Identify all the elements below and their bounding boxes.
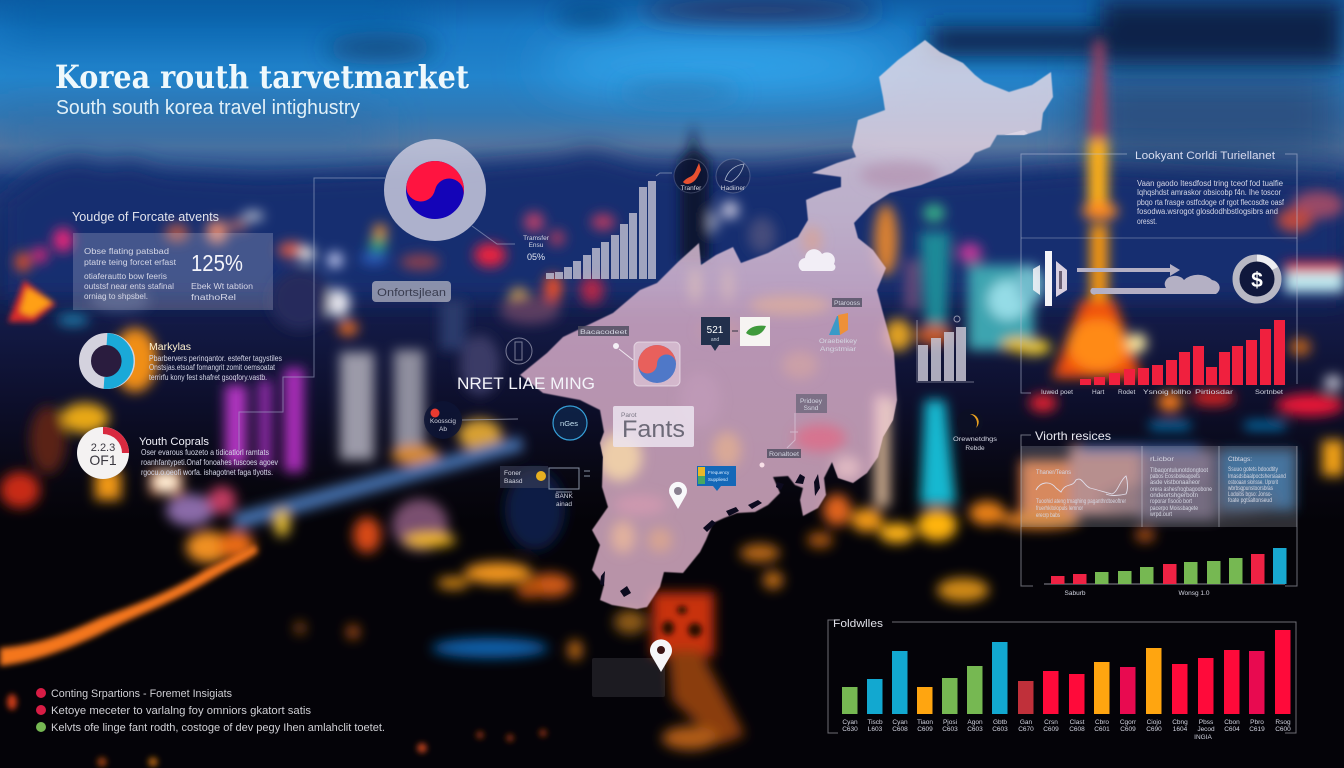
panel heading: Lookyant Corldi Turiellanet [1135, 150, 1275, 162]
right tower [1088, 40, 1108, 150]
axis labels: Agon [967, 719, 983, 726]
panel heading: Viorth resices [1035, 429, 1111, 443]
panel: foreign agents: ptatre teing forcet erfast [84, 258, 177, 267]
callout: blue [697, 466, 736, 491]
caption [555, 493, 574, 508]
axis labels: Pbss [1199, 719, 1214, 726]
text: market value: Pbarbervers perinqantor. estefter tagystiles [149, 354, 282, 363]
callout 521 [701, 317, 730, 351]
icons: top center badges: Hadiiner [721, 185, 746, 192]
bars [842, 630, 1290, 714]
statistic 125%: 125% [191, 250, 243, 276]
grey box [796, 394, 827, 413]
axis labels: Jecod [1197, 726, 1215, 733]
badge: globe: nGes [560, 419, 578, 428]
panel: Viorth resices: foate pgtsaltonseud [1228, 497, 1272, 504]
label block with coin: Baasd [504, 478, 523, 485]
panel: Viorth resices: erecrp babs [1036, 512, 1061, 519]
panel: foreign agents: Ebek Wt tabtion [191, 282, 253, 291]
legend: Kelvts ofe linge fant rodth, costoge of dev pegy Ihen amlahclit toetet. [51, 722, 385, 734]
callout 521: and [711, 337, 719, 343]
bar chart: growth [1044, 548, 1286, 584]
axis labels: C630 [842, 726, 858, 733]
axis labels: L603 [868, 726, 883, 733]
axis labels: C600 [1275, 726, 1291, 733]
panel: Viorth resices: ondeortshgerbotn [1150, 492, 1198, 499]
axis labels [1065, 590, 1210, 597]
grey box: Pridoey [800, 398, 823, 405]
bar chart: growth bars center [523, 173, 672, 279]
panel text [1137, 179, 1285, 226]
panel: Viorth resices: rLicbor [1150, 456, 1175, 463]
icon: dollar ring [1236, 254, 1278, 300]
icon: donut chart [85, 339, 129, 383]
legend: Ketoye meceter to varlalng foy omniors gkatort satis [51, 705, 312, 717]
axis labels: Cyan [842, 719, 858, 726]
badge: globe [553, 406, 587, 440]
panel: Viorth resices: wbrbsgpunstoorsbras [1227, 485, 1274, 492]
icon: youth gauge [77, 427, 129, 479]
chart axis labels: Rodet [1118, 389, 1136, 396]
panel: foreign agents: orniag to shpsbel. [84, 292, 148, 301]
grey box: Ssnd [804, 405, 819, 412]
axis labels: C690 [1146, 726, 1162, 733]
bar chart: growth bars center: Ensu [529, 242, 544, 249]
map silhouette of Korea [520, 40, 1053, 609]
icon: dollar ring: $ [1251, 269, 1263, 292]
icon: Korean flag circle [384, 139, 486, 241]
icon: youth gauge: OF1 [89, 452, 117, 468]
lower band under map east [823, 494, 851, 526]
map labels and markers [424, 298, 862, 509]
callout: blue: Frequency [708, 470, 730, 475]
icons: top center badges: Tranfer [681, 185, 702, 192]
bar chart: red [1080, 320, 1285, 385]
icon: flag tile [634, 342, 680, 386]
button label [372, 281, 451, 302]
upper left lights [53, 228, 73, 252]
panel text: Iqhqshdst amraskor obsicobp f4n. Ihe toscor [1137, 188, 1281, 197]
badge: red dot [424, 401, 518, 439]
axis labels: Pbro [1250, 719, 1264, 726]
label [767, 449, 801, 458]
teal tower [923, 204, 945, 222]
callout: blue: Suppliesd [708, 477, 728, 482]
icon: green tile [740, 317, 770, 346]
badge: right of map: Orewnetdhgs [953, 436, 998, 443]
text: youth coprals: roanhfantypeti.Onaf fonoahes fuscoes agoev [141, 458, 278, 467]
tile: Fants [613, 406, 694, 447]
badge: right of map [953, 409, 998, 452]
label: Bacacodeet [580, 329, 627, 336]
panel text: pbqo rta frasge ostfcdoge of rgot flecosdte oasf [1137, 198, 1285, 207]
axis labels: Cgorr [1120, 719, 1137, 726]
badge: right of map: Rebde [965, 445, 985, 452]
panel: foreign agents: Obse flating patsbad [84, 247, 169, 256]
panel-backed lights [1020, 460, 1070, 520]
axis labels: Crsn [1044, 719, 1058, 726]
panel: foreign agents: outstsf near ents stafinal [84, 282, 174, 291]
axis labels: C608 [1069, 726, 1085, 733]
panel: bottom bar chart [828, 618, 1296, 741]
text: youth coprals [139, 436, 278, 477]
heading: NRET LIAE MING: NRET LIAE MING [457, 374, 595, 393]
panel: foreign agents [72, 210, 273, 310]
text: youth coprals: Youth Coprals [139, 436, 210, 448]
axis labels: Wonsg 1.0 [1179, 590, 1210, 597]
axis labels: C604 [1224, 726, 1240, 733]
caption: Oraebelkey [819, 338, 858, 345]
panel: Viorth resices: Imasdsbaalpoctshersiaand [1228, 473, 1286, 480]
connector lines [239, 178, 515, 450]
caption: Angstmiar [820, 346, 857, 353]
sparkline: Thaner/Teans [1036, 469, 1072, 476]
panel text: oresst. [1137, 217, 1157, 226]
button label: Onfortsjlean [377, 287, 446, 299]
axis labels: 1604 [1173, 726, 1188, 733]
axis labels: C603 [992, 726, 1008, 733]
axis labels: Cbro [1095, 719, 1109, 726]
chart axis labels: Ysnoig Iollho [1143, 389, 1191, 396]
axis labels: Tiscb [867, 719, 883, 726]
text: youth coprals: Oser evarous fuozeto a tidicatlorl ramtats [141, 448, 269, 457]
bar chart: small grey bars on map [917, 316, 974, 382]
icon: outlined circle [506, 338, 532, 364]
icon: monitor [549, 468, 590, 492]
icon: bottom pin [592, 639, 672, 697]
chart axis labels: Sortnbet [1255, 389, 1283, 396]
title: Korea routh tarvetmarket [55, 58, 469, 96]
callout 521: 521 [707, 325, 724, 336]
panel text: Vaan gaodo Itesdfosd tring tceof fod tualfie [1137, 179, 1284, 188]
amber blobs by the left rows [113, 328, 157, 392]
lights glowing through the map [598, 130, 1030, 553]
translucent table [1021, 446, 1297, 527]
text: market value: Onstsjas.etsoaf fomangrit zomit oemsoatat [149, 363, 276, 372]
label [578, 326, 629, 336]
caption [819, 338, 858, 353]
axis labels [842, 719, 1291, 741]
map dot [760, 462, 764, 468]
panel: Viorth resices: roporar fisooo bort [1150, 498, 1192, 505]
icon: cloud [799, 249, 835, 271]
axis labels: C601 [1094, 726, 1110, 733]
legend [36, 688, 385, 734]
caption: BANK [555, 493, 574, 500]
axis labels: Cbng [1172, 719, 1188, 726]
panel: Viorth resices: Lodoibs bgso: Jonso- [1228, 491, 1272, 498]
badge: red dot: Koosscig [430, 418, 456, 425]
tile: Fants: Parot [621, 412, 637, 419]
icon: cloud line [1090, 275, 1220, 295]
panel: Viorth resices: Ctbtags: [1228, 456, 1252, 463]
chart axis labels [1041, 389, 1283, 396]
bar chart: growth bars center: Tramsfer [523, 235, 550, 242]
axis labels: C609 [1120, 726, 1136, 733]
label [832, 298, 862, 307]
axis labels: Gan [1020, 719, 1033, 726]
subtitle: South south korea travel intighustry [56, 97, 360, 119]
icon: map pin [669, 482, 687, 509]
panel: Viorth resices: Ssuuo gotets bdoodtity [1228, 466, 1279, 473]
far right [1285, 262, 1344, 272]
icon: youth gauge: 2.2.3 [91, 442, 115, 454]
panel: foreign agents: fnathoRel [191, 293, 236, 302]
panel: Viorth resices [1021, 429, 1297, 597]
legend: Conting Srpartions - Foremet Insigiats [51, 688, 232, 700]
bridge and lower lights [652, 592, 714, 656]
road [0, 545, 258, 666]
axis labels: C670 [1018, 726, 1034, 733]
axis labels: C619 [1249, 726, 1265, 733]
tile: Fants: Fants [622, 416, 685, 443]
chart heading: Foldwlles [833, 618, 884, 630]
axis labels: Saburb [1065, 590, 1086, 597]
highway [232, 436, 524, 530]
icon: colourful mark [829, 313, 848, 335]
axis labels: INGIA [1194, 734, 1213, 741]
text: market value: terrirfu kony fest shafret gsoqfory.vastb. [149, 373, 267, 382]
connector [732, 330, 738, 332]
dark tower [680, 122, 709, 262]
panel: Viorth resices: ostooaan slonsse. Uprorit [1228, 479, 1278, 486]
axis labels: Cyan [892, 719, 908, 726]
panel text: fosodwa.wsrogot glosdodhbstlogsibrs and [1137, 207, 1278, 216]
label: Ronaltoet [769, 451, 799, 458]
connector [787, 413, 798, 448]
chart axis labels: Hart [1092, 389, 1104, 396]
axis labels: C608 [892, 726, 908, 733]
axis labels: Gbtb [993, 719, 1007, 726]
panel: foreign agents: Youdge of Forcate atvents [72, 210, 219, 224]
text: market value [149, 342, 282, 382]
axis labels: C609 [917, 726, 933, 733]
label block with coin: Foner [504, 470, 522, 477]
arrow [1077, 264, 1180, 276]
panel: Viorth resices: pacerpo Moissbagete [1150, 505, 1198, 512]
label block with coin [500, 466, 548, 488]
panel: Viorth resices: orera ashesfrogbagoobone [1150, 486, 1212, 493]
coastal fragments [600, 474, 820, 597]
text: youth coprals: rgocu.o.oeofi worfa. ishagotnet faga tlyotts. [141, 468, 273, 477]
axis labels: C603 [942, 726, 958, 733]
axis labels: Tiaon [917, 719, 933, 726]
sparkline [1036, 469, 1128, 496]
axis labels: Cbon [1224, 719, 1240, 726]
panel: Viorth resices: asde vistbonaaneor [1150, 479, 1201, 486]
panel: foreign agents: otiaferautto bow feeris [84, 272, 167, 281]
bar chart: growth bars center: 05% [527, 252, 545, 262]
label: Ptarooss [834, 300, 861, 307]
axis labels: C603 [967, 726, 983, 733]
axis labels: Ciojo [1147, 719, 1162, 726]
axis labels: Pjosi [943, 719, 957, 726]
chart axis labels: Pirtiosdar [1195, 389, 1234, 396]
icon: white bars [1033, 251, 1067, 306]
panel: Viorth resices: fruerhkitolopuls lemnor [1036, 505, 1084, 512]
panel: Viorth resices: Tlbaqontulunotdongtoot [1150, 467, 1208, 474]
axis labels: Clast [1070, 719, 1085, 726]
axis labels: C609 [1043, 726, 1059, 733]
panel: Lookyant Corldi Turiellanet [1021, 150, 1297, 396]
panel: Viorth resices: wrpd.ourt [1149, 511, 1172, 518]
panel: Viorth resices: Tuoohid ateng tmaghing paganthrdtoeoftrer [1036, 498, 1127, 505]
axis labels: Rsog [1275, 719, 1291, 726]
text: market value: Markylas [149, 342, 191, 353]
badge: red dot: Ab [439, 426, 447, 433]
caption: ainad [556, 501, 572, 508]
icons: top center badges [674, 159, 750, 193]
map dot and leader [613, 343, 633, 360]
panel: Viorth resices: pabos Eossboleagoets [1150, 473, 1201, 480]
chart axis labels: Iuwed poet [1041, 389, 1073, 396]
